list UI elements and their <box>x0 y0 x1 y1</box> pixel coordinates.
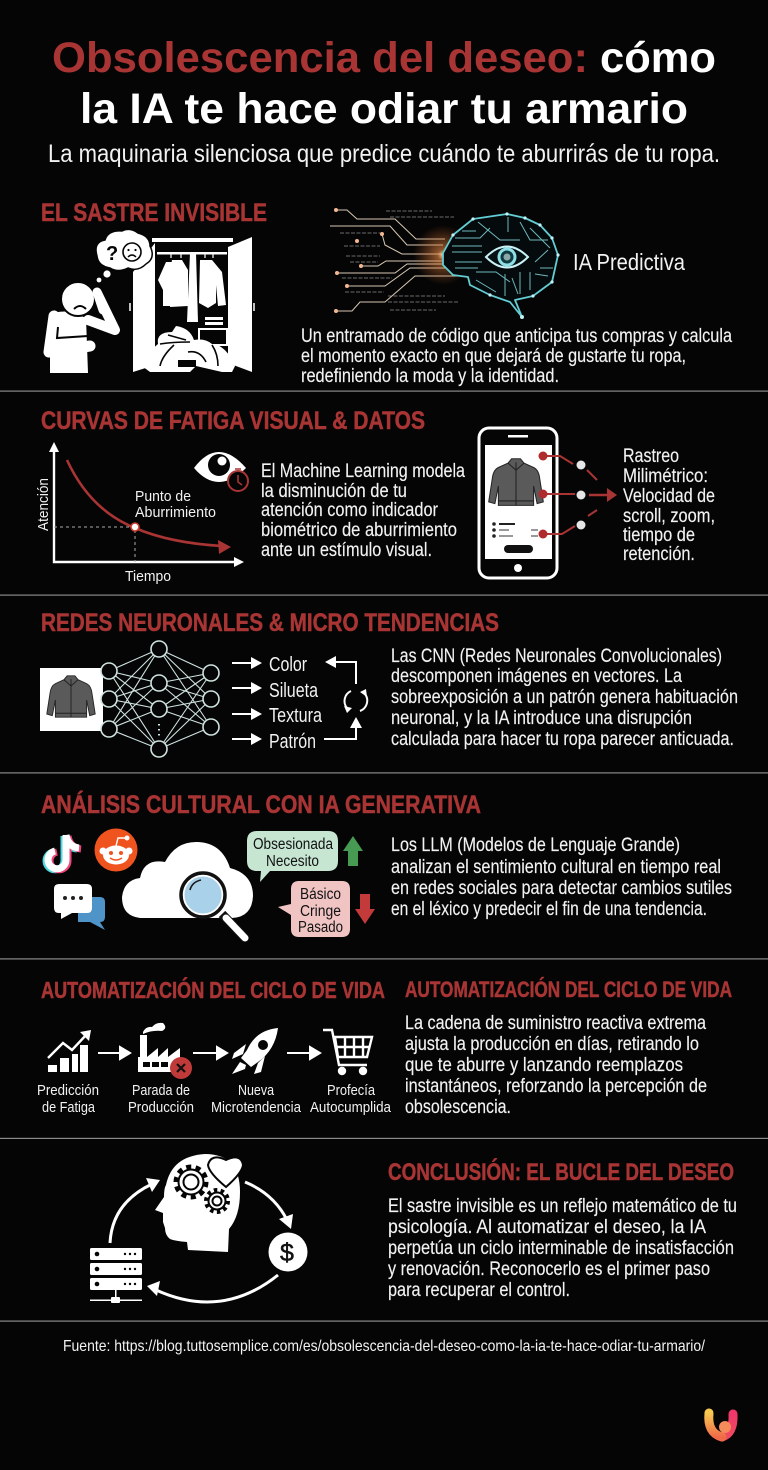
step labels: Autocumplida <box>310 1099 392 1116</box>
chart: attention curve: Atención <box>35 478 52 531</box>
text block: sastre description: redefiniendo la moda y la identidad. <box>301 366 559 387</box>
icon: eye with timer <box>194 452 248 491</box>
text block: machine learning: atención como indicador <box>261 500 439 521</box>
step labels: Parada de <box>132 1082 190 1099</box>
icon: shopping cart <box>323 1030 372 1074</box>
icon: chat bubbles <box>54 884 105 930</box>
panel: conclusión <box>90 1154 737 1303</box>
arrows and feature labels: Patrón <box>269 731 316 753</box>
arrows and feature labels: Silueta <box>269 680 319 702</box>
text block: conclusión: psicología. Al automatizar el deseo, la IA <box>388 1217 706 1238</box>
step labels: de Fatiga <box>42 1099 96 1116</box>
callout: positive words: Necesito <box>266 853 319 870</box>
heading: el sastre invisible: EL SASTRE INVISIBLE <box>41 199 267 227</box>
title: la IA te hace odiar tu armario <box>80 85 688 133</box>
text block: sastre description <box>301 326 732 387</box>
text block: CNN: neuronal, y la IA introduce una disrupción <box>391 708 692 729</box>
text block: machine learning: El Machine Learning modela <box>261 461 465 482</box>
panel: curvas de fatiga <box>35 407 715 585</box>
text block: LLM: analizan el sentimiento cultural en tiempo real <box>391 857 721 878</box>
arrow <box>287 1047 320 1059</box>
label: IA predictiva: IA Predictiva <box>573 249 685 275</box>
callout: positive words <box>247 831 363 882</box>
text block: supply chain: que te aburre y lanzando reemplazos <box>405 1055 683 1076</box>
heading: redes neuronales: REDES NEURONALES & MICRO TENDENCIAS <box>41 609 499 637</box>
text block: CNN: descomponen imágenes en vectores. La <box>391 666 682 687</box>
icon: person with thought bubble: ? <box>106 243 118 265</box>
step labels <box>37 1082 392 1116</box>
text block: supply chain: obsolescencia. <box>405 1097 511 1118</box>
panel: redes neuronales <box>40 609 738 757</box>
icon: reddit <box>94 828 138 872</box>
text block: rastreo: tiempo de <box>623 525 695 546</box>
step labels: Profecía <box>327 1082 376 1099</box>
callout: negative words: Básico <box>300 886 341 903</box>
step labels: Microtendencia <box>211 1099 302 1116</box>
arrows and feature labels <box>232 654 367 753</box>
step labels: Nueva <box>238 1082 275 1099</box>
heading: automatización left: AUTOMATIZACIÓN DEL CICLO DE VIDA <box>41 976 385 1003</box>
step labels: Predicción <box>37 1082 99 1099</box>
text block: machine learning: biométrico de aburrimiento <box>261 520 457 541</box>
icon: wardrobe with messy clothes <box>130 237 254 372</box>
icon: tiktok <box>46 835 81 870</box>
text block: rastreo: Velocidad de <box>623 486 715 507</box>
text block: machine learning: la disminución de tu <box>261 481 407 502</box>
icon: jacket input <box>40 668 103 731</box>
text block: supply chain <box>405 1013 707 1118</box>
text block: supply chain: La cadena de suministro reactiva extrema <box>405 1013 706 1034</box>
icon: phone tracking <box>479 428 617 578</box>
chart: attention curve: Tiempo <box>125 568 171 585</box>
callout: negative words: Cringe <box>300 903 341 920</box>
arrows and feature labels: Textura <box>269 705 323 727</box>
callout: negative words <box>278 881 375 937</box>
icon: logo <box>709 1413 733 1437</box>
icon: rocket <box>232 1028 278 1074</box>
chart: attention curve: Punto de <box>135 488 191 505</box>
step labels: Producción <box>128 1099 194 1116</box>
text block: machine learning <box>261 461 465 561</box>
arrow <box>193 1047 227 1059</box>
text block: rastreo: scroll, zoom, <box>623 506 715 527</box>
callout: positive words: Obsesionada <box>253 836 333 853</box>
icon: head loop diagram <box>90 1154 308 1303</box>
chart: attention curve: Aburrimiento <box>135 504 216 521</box>
icon: person with thought bubble <box>49 229 152 373</box>
text block: CNN <box>391 646 738 750</box>
text block: conclusión <box>388 1196 737 1301</box>
title <box>52 34 716 133</box>
arrow <box>98 1047 130 1059</box>
title: cómo <box>600 34 716 82</box>
text block: LLM: en el léxico y predecir el fin de una tendencia. <box>391 899 707 920</box>
heading: curvas de fatiga: CURVAS DE FATIGA VISUAL & DATOS <box>41 407 425 435</box>
text block: conclusión: y renovación. Reconocerlo es el primer paso <box>388 1259 710 1280</box>
icon: factory stopped <box>138 1023 192 1079</box>
panel: el sastre invisible <box>41 199 732 387</box>
icon: prediction chart <box>48 1030 91 1072</box>
text block: rastreo: retención. <box>623 544 695 565</box>
text block: sastre description: el momento exacto en que dejará de gustarte tu ropa, <box>301 346 686 367</box>
heading: análisis cultural: ANÁLISIS CULTURAL CON IA GENERATIVA <box>41 790 481 819</box>
text block: LLM <box>391 835 732 920</box>
title: Obsolescencia del deseo: <box>52 34 588 82</box>
text block: supply chain: ajusta la producción en días, retirando lo <box>405 1034 699 1055</box>
callout: negative words: Pasado <box>298 919 343 936</box>
text block: rastreo: Rastreo <box>623 446 679 467</box>
chart: neural network <box>101 641 219 757</box>
arrows and feature labels: Color <box>269 654 307 676</box>
icon: predictive AI brain <box>330 208 560 319</box>
icon: head loop diagram: $ <box>280 1239 294 1267</box>
text block: machine learning: ante un estímulo visual. <box>261 540 432 561</box>
chart: attention curve <box>35 442 244 585</box>
text block: LLM: Los LLM (Modelos de Lenguaje Grande) <box>391 835 680 856</box>
text block: rastreo: Milimétrico: <box>623 466 708 487</box>
text block: conclusión: para recuperar el control. <box>388 1280 570 1301</box>
text block: rastreo <box>623 446 715 565</box>
panel: análisis cultural <box>41 790 732 939</box>
text block: supply chain: instantáneos, reforzando la percepción de <box>405 1076 707 1097</box>
icon: cloud with magnifier <box>122 842 253 939</box>
panel: automatización <box>37 976 732 1118</box>
